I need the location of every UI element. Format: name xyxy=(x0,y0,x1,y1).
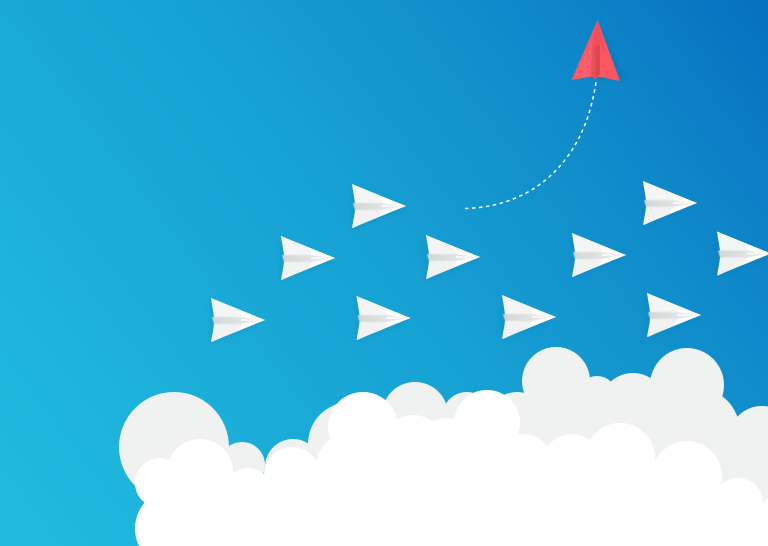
icon: white plane, bottom third xyxy=(501,295,556,341)
dashed flight path xyxy=(465,82,596,208)
icon: white plane, bottom right xyxy=(646,293,701,339)
icon: red paper plane xyxy=(572,20,625,81)
icon: white plane, top right xyxy=(642,181,697,227)
icon: white plane, bottom left xyxy=(210,298,265,344)
clouds: rear grey layer xyxy=(119,347,768,546)
icon: white plane, second row right xyxy=(571,233,626,279)
icon: white plane, second row left xyxy=(280,236,335,282)
clouds: front white layer xyxy=(135,390,768,546)
icon: white plane, top centre xyxy=(351,184,406,230)
icon: white plane, far right edge xyxy=(716,232,768,278)
icon: white plane, second row centre xyxy=(425,235,480,281)
icon: white plane, bottom second xyxy=(356,296,410,342)
